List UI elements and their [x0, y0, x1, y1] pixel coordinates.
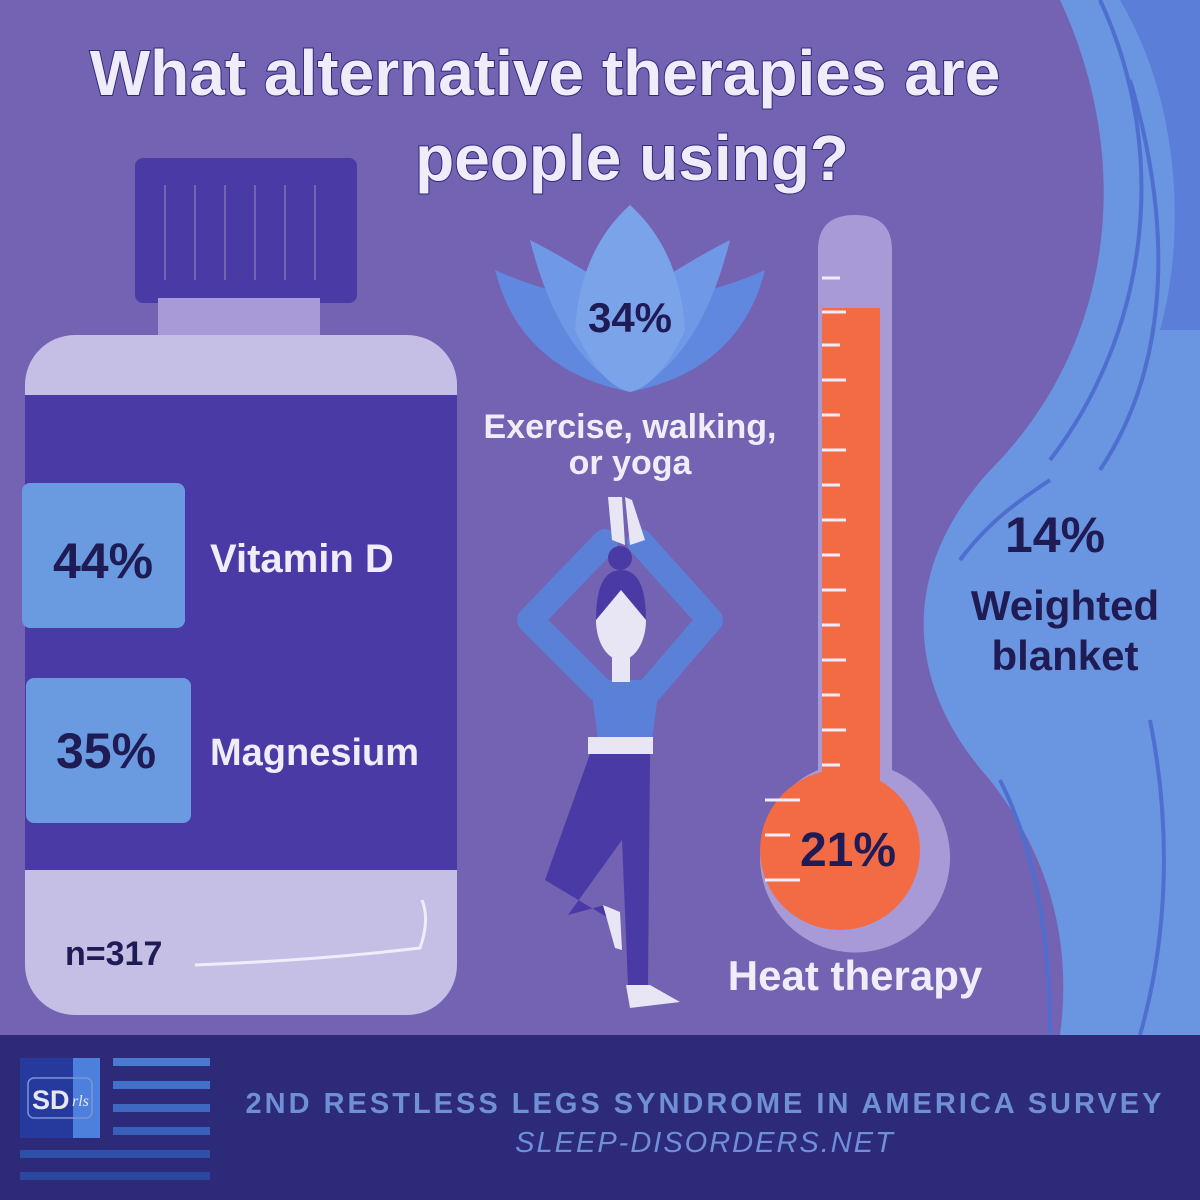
exercise label: Exercise, walking, — [484, 408, 776, 446]
lotus icon: 34% — [588, 294, 672, 341]
thermometer — [760, 215, 950, 952]
blanket background shape — [924, 0, 1200, 1035]
footer — [0, 1035, 1200, 1200]
heat therapy label: Heat therapy — [728, 952, 983, 999]
magnesium stat: Magnesium — [210, 732, 419, 774]
magnesium stat: 35% — [56, 723, 156, 779]
title: people using? — [415, 122, 849, 194]
logo — [20, 1058, 210, 1180]
logo: SD — [32, 1085, 70, 1115]
weighted blanket stat: blanket — [991, 632, 1139, 679]
yoga figure — [530, 497, 710, 1008]
bottle — [22, 158, 457, 1015]
vitamin D stat — [22, 483, 394, 628]
vitamin D stat: 44% — [53, 533, 153, 589]
weighted blanket stat: Weighted — [971, 582, 1159, 629]
logo: rls — [72, 1093, 89, 1110]
title — [90, 37, 1000, 194]
thermometer: 21% — [800, 824, 896, 877]
survey name: 2ND RESTLESS LEGS SYNDROME IN AMERICA SURVEY — [246, 1088, 1164, 1120]
magnesium stat — [26, 678, 419, 823]
exercise label: or yoga — [569, 444, 692, 482]
vitamin D stat: Vitamin D — [210, 537, 394, 581]
weighted blanket stat — [971, 507, 1159, 679]
title: What alternative therapies are — [90, 37, 1000, 109]
exercise label — [484, 408, 776, 482]
lotus icon — [495, 205, 765, 392]
weighted blanket stat: 14% — [1005, 507, 1105, 563]
website: SLEEP-DISORDERS.NET — [515, 1127, 895, 1159]
sample size: n=317 — [65, 935, 162, 973]
